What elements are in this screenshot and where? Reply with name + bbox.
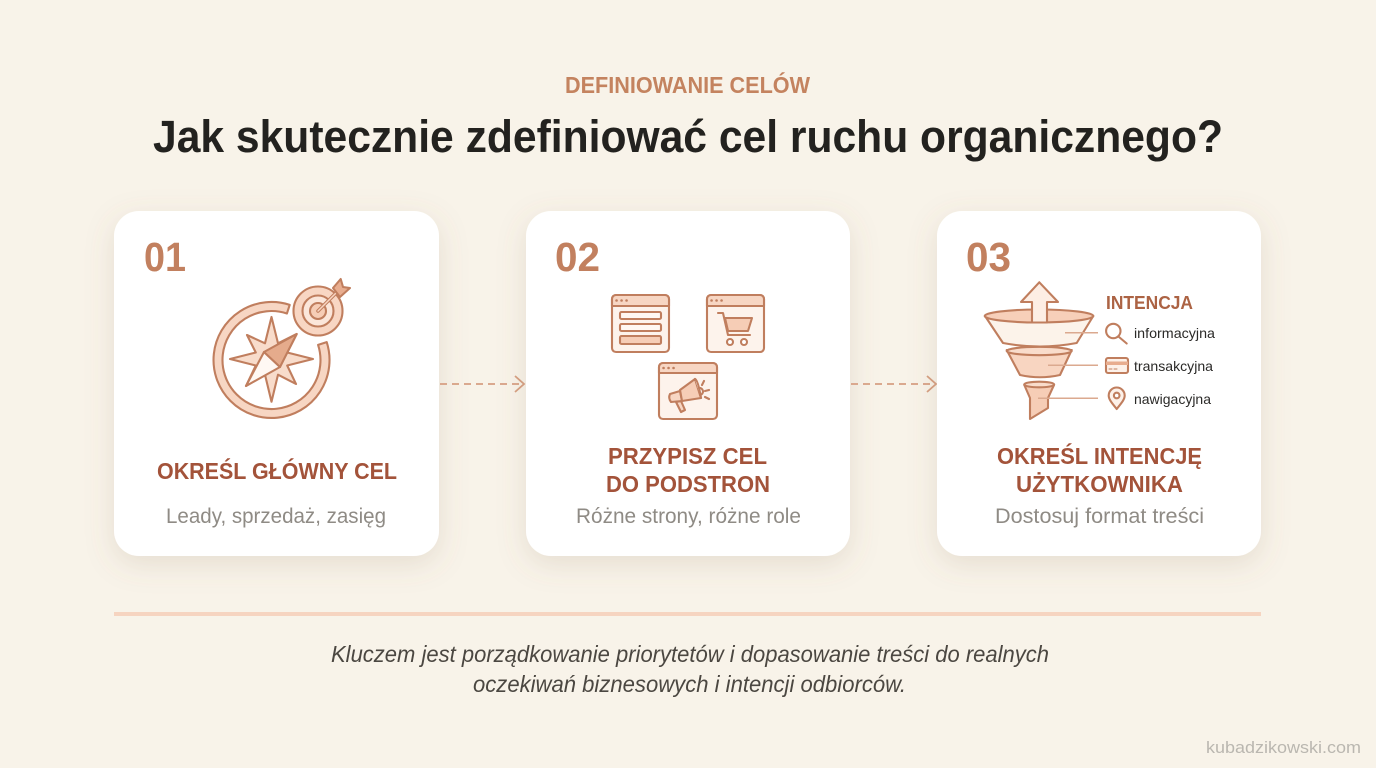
closing statement: oczekiwań biznesowych i intencji odbiorców. — [473, 671, 906, 697]
panel: step 1 — [114, 211, 439, 556]
legend heading: INTENCJA — [1106, 293, 1193, 313]
icon: form window — [612, 295, 669, 352]
description: step 2: Różne strony, różne role — [576, 505, 801, 528]
icon: location pin — [1109, 388, 1125, 409]
icon: magnifier — [1106, 324, 1127, 344]
closing statement — [331, 641, 1049, 697]
description: step 1: Leady, sprzedaż, zasięg — [166, 505, 386, 528]
heading: step 2: PRZYPISZ CEL — [608, 443, 767, 469]
icon: megaphone window — [659, 363, 717, 419]
step number 01: 01 — [144, 234, 186, 280]
icon: credit card — [1106, 358, 1128, 373]
label: informacyjna: informacyjna — [1134, 325, 1215, 341]
eyebrow heading: DEFINIOWANIE CELÓW — [565, 71, 810, 98]
description: step 3: Dostosuj format treści — [995, 505, 1204, 528]
heading: step 3: OKREŚL INTENCJĘ — [997, 442, 1202, 469]
title: Jak skutecznie zdefiniować cel ruchu organicznego? — [153, 111, 1223, 162]
arrow: step 1 to 2 — [440, 376, 524, 392]
heading: step 2 — [606, 443, 770, 497]
arrow: step 2 to 3 — [851, 376, 936, 392]
label: transakcyjna: transakcyjna — [1134, 358, 1213, 374]
icon: funnel — [985, 282, 1093, 419]
heading: step 3 — [997, 442, 1202, 497]
icon: shop window — [707, 295, 764, 352]
panel: step 3 — [937, 211, 1261, 556]
watermark: kubadzikowski.com — [1206, 738, 1361, 757]
step number 02: 02 — [555, 234, 600, 280]
heading: step 2: DO PODSTRON — [606, 471, 770, 497]
panel: step 2 — [526, 211, 850, 556]
closing statement: Kluczem jest porządkowanie priorytetów i dopasowanie treści do realnych — [331, 641, 1049, 667]
funnel connector lines — [1038, 333, 1098, 398]
icon: compass and target — [214, 279, 350, 418]
heading: step 3: UŻYTKOWNIKA — [1016, 471, 1183, 497]
label: nawigacyjna: nawigacyjna — [1134, 391, 1211, 407]
step number 03: 03 — [966, 234, 1011, 280]
heading: step 1: OKREŚL GŁÓWNY CEL — [157, 457, 397, 484]
